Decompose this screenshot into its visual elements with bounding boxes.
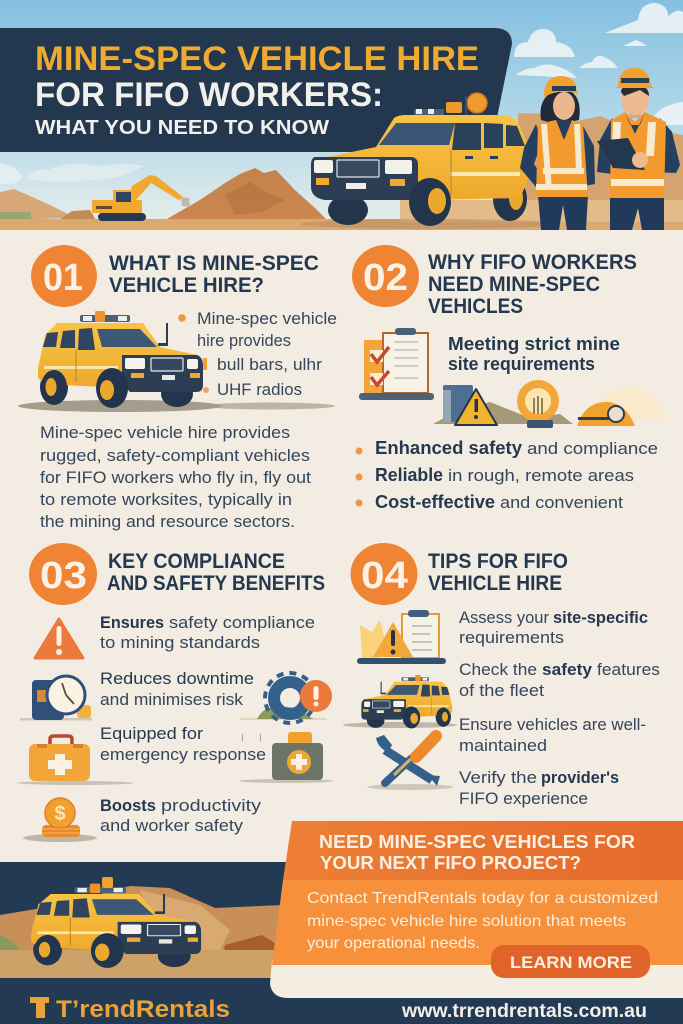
benefit list: Enhanced safety <box>375 438 522 458</box>
text: well-maintained: Ensure vehicles are well- <box>459 715 646 734</box>
text: emergency response: emergency response <box>100 745 266 764</box>
heading 03: AND SAFETY BENEFITS <box>107 572 325 595</box>
worker: woman <box>520 76 595 230</box>
benefit list <box>356 438 658 512</box>
text: provider experience: Verify the <box>459 768 537 787</box>
text: safety features: of the fleet <box>459 681 544 700</box>
text: productivity: productivity <box>161 796 262 815</box>
CTA body <box>272 880 683 965</box>
heading 02: WHY FIFO WORKERS <box>428 251 637 274</box>
call to action panel <box>270 821 683 998</box>
text: downtime: Reduces downtime <box>100 669 254 688</box>
benefit list: in rough, remote areas <box>448 466 634 485</box>
CTA text: Contact TrendRentals today for a customized <box>307 890 658 907</box>
heading 02: VEHICLES <box>428 295 523 318</box>
CTA text <box>307 890 658 952</box>
description paragraph: rugged, safety-compliant vehicles <box>40 446 310 465</box>
heading 02: NEED MINE-SPEC <box>428 273 600 296</box>
CTA heading: NEED MINE-SPEC VEHICLES FOR <box>319 832 635 852</box>
heading 01: WHAT IS MINE-SPEC <box>109 252 319 275</box>
title: MINE-SPEC VEHICLE HIRE <box>35 40 479 78</box>
benefit list: Reliable <box>375 465 443 485</box>
footer band <box>0 862 683 1024</box>
panel: 04 tips for FIFO vehicle hire <box>343 543 660 808</box>
number badge 02: 02 <box>363 257 408 299</box>
icon: emergency kit <box>239 732 333 783</box>
icon: wrench and screwdriver <box>367 735 453 790</box>
text: productivity <box>100 796 262 835</box>
benefit list: Cost-effective <box>375 492 495 512</box>
icon: gear and alert <box>240 673 332 723</box>
distant rock wall <box>518 113 683 208</box>
icon: small vehicle <box>343 675 457 728</box>
text: safety compliance: safety compliance <box>169 613 315 632</box>
text: productivity: Boosts <box>100 796 156 815</box>
cream base <box>270 960 683 998</box>
feature list: bull bars, ulhr <box>217 355 322 374</box>
feature list <box>178 309 337 399</box>
text: well-maintained: maintained <box>459 736 547 755</box>
icon: coins: $ <box>54 803 66 825</box>
number badge 03: 03 <box>40 555 87 597</box>
icon: emergency kit: I <box>259 733 262 744</box>
subheading: Meeting strict mine <box>448 334 620 354</box>
heading 04: VEHICLE HIRE <box>428 572 562 595</box>
website url: www.trrendrentals.com.au <box>401 1001 647 1022</box>
text: provider experience: provider's <box>541 768 619 787</box>
feature list: Mine-spec vehicle <box>197 309 337 328</box>
heading 04: TIPS FOR FIFO <box>428 550 568 573</box>
description paragraph: to remote worksites, typically in <box>40 490 292 509</box>
ground shadow <box>300 219 560 229</box>
icon row: hazards and safety gear <box>433 380 667 428</box>
number badge 01 <box>31 245 97 307</box>
icon: clipboard checklist <box>359 328 434 400</box>
heading 03 <box>107 550 325 595</box>
number badge 02 <box>352 245 419 307</box>
beacon <box>102 877 113 888</box>
CTA text: mine-spec vehicle hire solution that meets <box>307 913 626 930</box>
CTA heading: YOUR NEXT FIFO PROJECT? <box>320 853 581 873</box>
feature list: UHF radios <box>217 380 302 399</box>
worker: man <box>597 68 680 230</box>
number badge 04 <box>350 543 418 605</box>
text: safety features: features <box>597 660 660 679</box>
text: productivity: and worker safety <box>100 816 244 835</box>
text: assess requirements: requirements <box>459 628 564 647</box>
heading 02 <box>428 251 637 318</box>
number badge 03 <box>29 543 97 605</box>
subheading <box>448 334 620 374</box>
clouds <box>0 3 683 184</box>
text: downtime <box>100 669 254 709</box>
text: assess requirements: site-specific <box>553 608 648 627</box>
title: FOR FIFO WORKERS: <box>35 76 383 114</box>
description paragraph: the mining and resource sectors. <box>40 512 295 531</box>
heading 03: KEY COMPLIANCE <box>108 550 285 573</box>
icon: warning triangle <box>35 619 83 658</box>
icon: emergency kit: I <box>241 733 244 744</box>
icon: first aid case <box>17 736 133 785</box>
text: safety compliance: to mining standards <box>100 633 260 652</box>
icon: clipboard with warning <box>357 610 446 664</box>
panel: 02 why FIFO workers need mine-spec vehicles <box>352 245 667 512</box>
ground <box>0 219 683 230</box>
title banner <box>0 28 512 152</box>
learn more button: LEARN MORE <box>510 953 632 972</box>
logo: T’rendRentals <box>56 996 230 1023</box>
heading 04 <box>428 550 568 595</box>
text: safety features: Check the <box>459 660 537 679</box>
CTA heading <box>319 832 635 873</box>
learn more button <box>491 945 650 978</box>
panel: 01 what is mine-spec vehicle hire <box>18 245 337 531</box>
text: emergency response <box>100 724 266 764</box>
shadow under vehicle <box>18 400 335 412</box>
CTA text: your operational needs. <box>307 935 480 952</box>
icon: vehicle <box>38 311 203 408</box>
feature list: hire provides <box>197 331 291 350</box>
rocky mine scene <box>0 886 283 978</box>
text: well-maintained <box>459 715 646 755</box>
text: downtime: and minimises risk <box>100 690 244 709</box>
benefit list: and compliance <box>527 439 658 458</box>
CTA header <box>283 821 683 880</box>
text: safety features <box>459 660 660 700</box>
header scene <box>0 0 683 230</box>
subheading: site requirements <box>448 354 595 374</box>
text: safety compliance: Ensures <box>100 613 164 632</box>
description paragraph <box>40 423 311 531</box>
title: WHAT YOU NEED TO KNOW <box>35 117 329 139</box>
benefit list: and convenient <box>500 493 623 512</box>
title <box>35 40 479 139</box>
heading 01 <box>109 252 319 297</box>
text: emergency response: Equipped for <box>100 724 203 743</box>
icon: clock and machine <box>20 676 92 720</box>
heading 01: VEHICLE HIRE? <box>109 274 264 297</box>
text: safety compliance <box>100 613 315 652</box>
text: provider experience <box>459 768 619 808</box>
text: assess requirements <box>459 608 648 647</box>
left hills <box>0 189 76 220</box>
text: safety features: safety <box>542 660 593 679</box>
text: assess requirements: Assess your <box>459 608 549 627</box>
excavator <box>92 175 190 221</box>
sky <box>0 0 683 222</box>
text: provider experience: FIFO experience <box>459 789 588 808</box>
vehicle: footer <box>31 884 201 968</box>
description paragraph: Mine-spec vehicle hire provides <box>40 423 290 442</box>
panel: 03 key compliance and safety benefits <box>17 543 333 842</box>
dirt pile <box>165 168 327 220</box>
icon: coins <box>23 798 97 842</box>
number badge 01: 01 <box>43 257 83 299</box>
description paragraph: for FIFO workers who fly in, fly out <box>40 468 311 487</box>
number badge 04: 04 <box>361 555 408 597</box>
vehicle: hero <box>311 93 528 226</box>
